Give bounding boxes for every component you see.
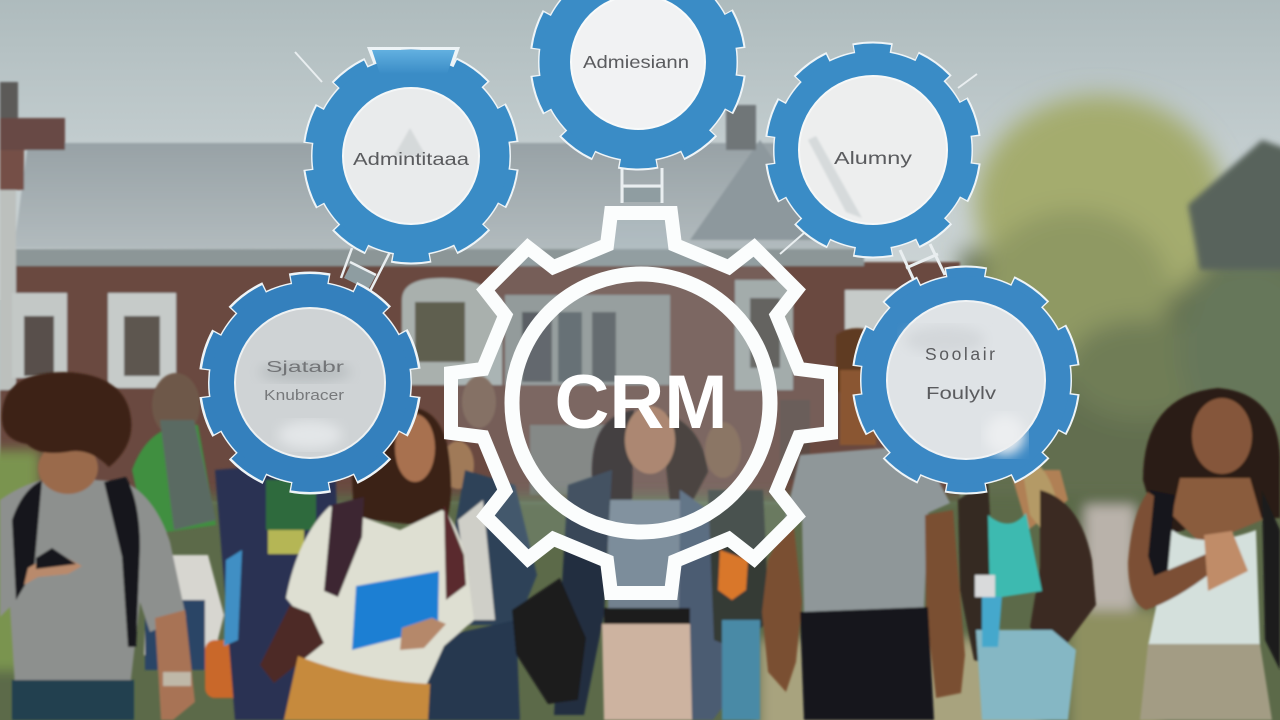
student: woman in centre [512, 406, 728, 720]
label: admissions: Admintitaaa [353, 149, 469, 169]
student: tall man in grey t-shirt [762, 328, 965, 720]
connector: alumni gear to right gear [900, 244, 945, 285]
student: woman with curly hair on right [1128, 388, 1280, 720]
CRM title: CRM [554, 360, 728, 445]
gear: admissions left [308, 47, 514, 259]
connector: top gear to CRM gear [622, 168, 662, 203]
student: background person in navy [215, 460, 345, 720]
inner ring [512, 274, 770, 532]
label: top line: Sjatabr [266, 359, 345, 376]
connector: alumni gear to CRM gear [780, 226, 812, 254]
wide top tooth outline [367, 47, 460, 76]
distant house roof [1188, 140, 1280, 270]
gear face [235, 308, 385, 458]
label: bottom line: Knubracer [264, 387, 344, 404]
label: top line: Soolair [925, 344, 995, 364]
blue book [352, 571, 439, 650]
wide top tooth [372, 50, 455, 74]
gear: social faculty right [857, 271, 1075, 489]
gear: student services lower left [204, 277, 416, 489]
student: person with orange shirt [705, 422, 769, 720]
gear: alumni [770, 47, 976, 253]
label: alumni: Alumny [834, 148, 912, 168]
students walking [0, 328, 1280, 720]
student: afro hair boy [0, 372, 195, 720]
student: woman in teal top [958, 455, 1096, 720]
central CRM gear [451, 213, 831, 593]
gear face [887, 301, 1045, 459]
brick building [0, 82, 960, 502]
gear outline [451, 213, 831, 593]
connectors between gears [295, 52, 977, 295]
decorative spark: upper right [958, 74, 977, 88]
gear face [343, 88, 479, 224]
gear: admissions top [535, 0, 741, 165]
label: admissions: Admiesiann [583, 52, 689, 72]
student: man in patterned jacket [426, 376, 537, 720]
gear face [799, 76, 947, 224]
label: bottom line: Foulylv [926, 383, 996, 403]
connector: left admissions gear to lower left gear [341, 248, 390, 295]
decorative spark: upper left [295, 52, 322, 82]
gear face [571, 0, 705, 129]
trees [960, 95, 1280, 550]
student: woman with blue book [260, 408, 474, 720]
student: background person in green [132, 373, 243, 698]
ground [0, 450, 1280, 720]
sky [0, 0, 1280, 300]
